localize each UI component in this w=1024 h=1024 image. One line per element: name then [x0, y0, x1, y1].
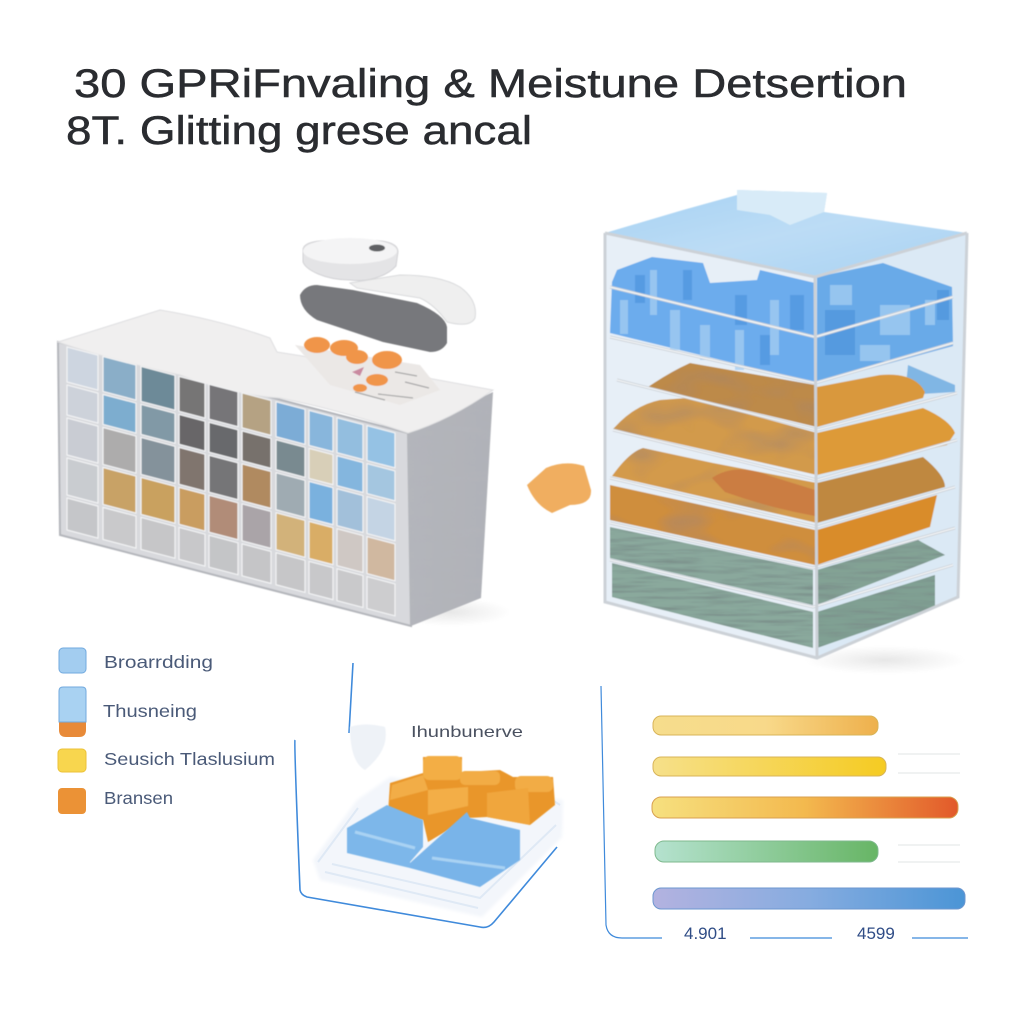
shelves: [610, 287, 957, 607]
window row 4: [67, 458, 395, 581]
faded shield shape: [350, 724, 386, 770]
legend item: Seusich Tlaslusium: [58, 749, 275, 772]
box body: [605, 233, 967, 658]
moss layer 2: [612, 563, 813, 648]
illustration: transparent layered box: [605, 190, 967, 674]
title: 30 GPRiFnvaling & Meistune Detsertion: [74, 62, 907, 106]
food band 1: [648, 363, 817, 427]
legend item: Thusneing: [59, 687, 197, 737]
bar 2: [653, 757, 886, 776]
illustration: orange pills on container top: [295, 337, 440, 405]
bar 5: [653, 888, 965, 909]
blue contents side: [817, 263, 953, 383]
moss layer 2 side: [817, 575, 935, 648]
food band 2: [613, 398, 817, 475]
food band 3: [612, 448, 817, 523]
food band 4 side: [817, 495, 937, 565]
axis value 2: 4599: [857, 924, 895, 943]
window row 2: [67, 385, 395, 501]
container front face: [58, 342, 411, 626]
food band 4: [610, 485, 815, 565]
title: [66, 62, 907, 153]
window row 1: [67, 347, 395, 468]
panel: tray illustration: [295, 663, 563, 927]
food band 3 side: [817, 457, 945, 523]
bar 1: [653, 716, 878, 735]
box outline: [605, 233, 967, 658]
tray blue blocks: [347, 805, 520, 887]
legend item: Thusneing: Thusneing: [103, 701, 197, 721]
tray orange blocks: [388, 756, 555, 842]
legend item: Bransen: [58, 788, 173, 814]
tray heading: Ihunbunerve: [411, 724, 523, 741]
tray base: [313, 777, 563, 917]
food band 2 side: [817, 408, 955, 475]
blue contents front: [610, 257, 815, 383]
legend item: Broarrdding: [59, 648, 213, 673]
legend item: Seusich Tlaslusium: Seusich Tlaslusium: [104, 749, 275, 769]
chart axes: [601, 686, 968, 938]
moss layer 1 side: [817, 540, 945, 605]
illustration: clip device: [300, 238, 475, 352]
title: 8T. Glitting grese ancal: [66, 109, 532, 153]
window row 3: [67, 418, 395, 541]
window row 5: [67, 498, 395, 616]
container side face: [408, 392, 493, 626]
legend: [58, 648, 275, 814]
bar 4: [655, 841, 878, 862]
icon: orange sample chip: [527, 463, 591, 513]
moss layer 1: [610, 527, 813, 605]
box lid: [605, 190, 967, 277]
food band 1 side: [817, 375, 925, 427]
front window grid: [67, 347, 395, 616]
axis value 1: 4.901: [684, 924, 727, 943]
legend item: Bransen: Bransen: [104, 788, 173, 808]
container top face: [58, 310, 493, 433]
bar 3: [652, 797, 958, 818]
panel: bar chart: [601, 686, 968, 943]
blue painted stripes: [620, 270, 935, 370]
illustration: grey grid container: [58, 310, 510, 626]
legend item: Broarrdding: Broarrdding: [104, 652, 213, 672]
